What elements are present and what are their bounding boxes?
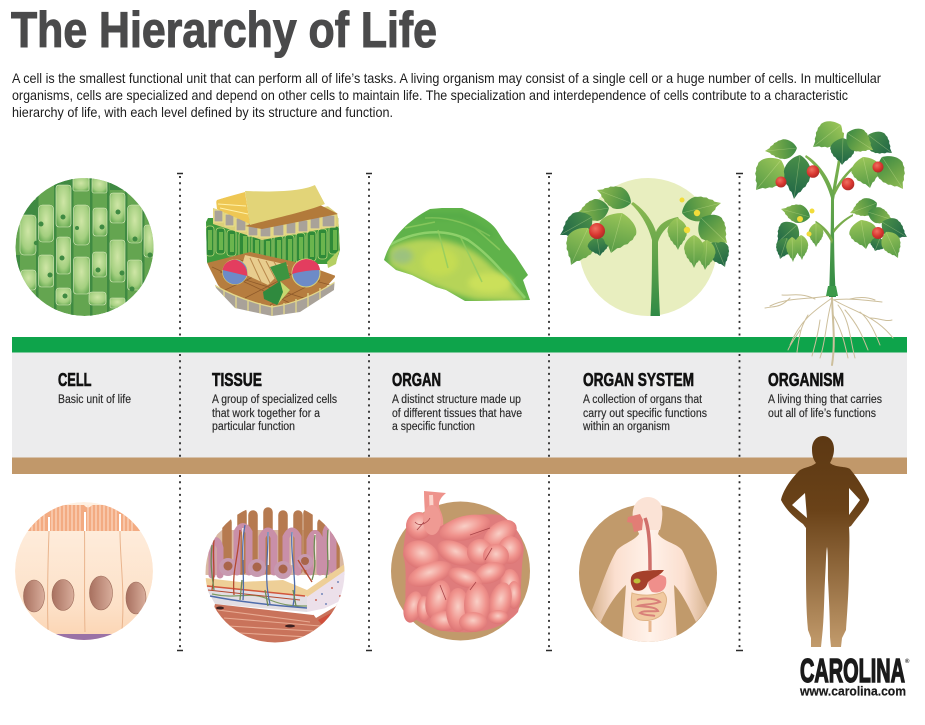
tan circle bbox=[391, 502, 530, 640]
human body bbox=[592, 497, 708, 642]
title: The Hierarchy of Life bbox=[11, 2, 437, 58]
esophagus bbox=[645, 518, 650, 570]
stem and branches bbox=[805, 132, 844, 297]
label: tissue: that work together for a bbox=[212, 408, 321, 420]
intestine mass backing bbox=[403, 514, 524, 632]
submucosa tan band bbox=[205, 563, 346, 597]
label: organ: a specific function bbox=[392, 421, 475, 433]
intro text: hierarchy of life, with each level defined by its structure and function. bbox=[12, 104, 393, 120]
flowers bbox=[680, 198, 700, 233]
label: organism bbox=[768, 370, 882, 420]
icon: whole tomato plant with roots bbox=[744, 115, 915, 365]
pink villi bbox=[212, 526, 333, 575]
green palisade base bbox=[205, 218, 341, 264]
icon: epithelial cell circle bbox=[15, 502, 153, 642]
top brown layer bbox=[245, 204, 338, 229]
label: organ: of different tissues that have bbox=[392, 408, 522, 420]
mouth and throat bbox=[627, 514, 643, 532]
intestine lobes bbox=[399, 510, 522, 632]
green bundles bbox=[263, 281, 290, 305]
icon: digestive organ system bbox=[579, 497, 717, 642]
tomato bbox=[589, 223, 605, 239]
icon: plant cell circle bbox=[15, 170, 155, 320]
lower epidermis cells bbox=[214, 282, 335, 316]
stub highlight bbox=[423, 505, 441, 535]
icon: intestine organ bbox=[391, 491, 530, 640]
icon: organ system shoot with pale circle bbox=[554, 178, 737, 316]
intro text: organisms, cells are specialized and depend on other cells to maintain life. The specialization and interdependence of cells contribute to a characteristic bbox=[12, 87, 848, 103]
vascular bundle left bbox=[222, 260, 248, 284]
right dotted block bbox=[307, 568, 346, 612]
muscle layer bbox=[214, 604, 338, 642]
flowers bbox=[797, 208, 814, 236]
label: tissue: particular function bbox=[212, 421, 295, 433]
roots bbox=[765, 295, 893, 365]
stem bbox=[631, 202, 679, 316]
label: organism: A living thing that carries bbox=[768, 394, 882, 406]
pale circle bbox=[579, 178, 717, 316]
label: organism: ORGANISM bbox=[768, 370, 844, 390]
vascular bundle right bbox=[292, 259, 320, 287]
green bar bbox=[12, 337, 907, 352]
grey cell row bbox=[213, 205, 340, 240]
label: tissue: A group of specialized cells bbox=[212, 394, 337, 406]
crypt bases bbox=[219, 554, 313, 579]
grey layer bbox=[205, 586, 307, 612]
liver bbox=[631, 570, 664, 591]
palisade cells bbox=[206, 226, 340, 262]
label: cell: CELL bbox=[58, 370, 92, 390]
tomatoes bbox=[776, 162, 884, 239]
blood vessels bbox=[211, 525, 328, 606]
vein stripes bbox=[240, 255, 288, 285]
label: cell bbox=[58, 370, 131, 406]
label: tissue: TISSUE bbox=[212, 370, 262, 390]
label: organ system: ORGAN SYSTEM bbox=[583, 370, 694, 390]
intestines bbox=[631, 592, 667, 632]
label: cell: Basic unit of life bbox=[58, 394, 131, 406]
label: organ system: A collection of organs that bbox=[583, 394, 703, 406]
stomach bbox=[648, 575, 666, 592]
label: organ bbox=[392, 370, 522, 433]
tan bar bbox=[12, 458, 907, 474]
label: organ system bbox=[582, 370, 707, 433]
brown fingers bbox=[227, 512, 335, 570]
label: organ: A distinct structure made up bbox=[392, 394, 521, 406]
label: organ system: carry out specific functions bbox=[583, 408, 707, 420]
microvilli bbox=[28, 505, 140, 531]
waxy layer bbox=[216, 192, 250, 224]
grey label band bbox=[12, 352, 907, 458]
basement membrane bbox=[56, 634, 112, 640]
icon: plant tissue cross-section bbox=[205, 185, 341, 316]
label: organ system: within an organism bbox=[582, 421, 670, 433]
duodenum stub bbox=[424, 491, 446, 536]
upper epidermis sheet bbox=[245, 185, 325, 225]
logo: Carolina: ® bbox=[905, 658, 910, 665]
label: tissue bbox=[212, 370, 337, 433]
label: organ: ORGAN bbox=[392, 370, 441, 390]
logo: Carolina: www.carolina.com bbox=[799, 684, 906, 698]
brown backing bbox=[205, 530, 345, 575]
intro text bbox=[12, 70, 881, 120]
icon: human silhouette bbox=[781, 436, 869, 647]
nuclei bbox=[24, 576, 146, 614]
icon: leaf organ bbox=[384, 208, 530, 302]
label: organism: out all of life’s functions bbox=[768, 408, 876, 420]
icon: intestinal tissue circle bbox=[205, 512, 346, 643]
lower leaf slab bbox=[207, 252, 336, 310]
cell walls bbox=[48, 531, 123, 632]
tan circle bbox=[579, 504, 717, 642]
